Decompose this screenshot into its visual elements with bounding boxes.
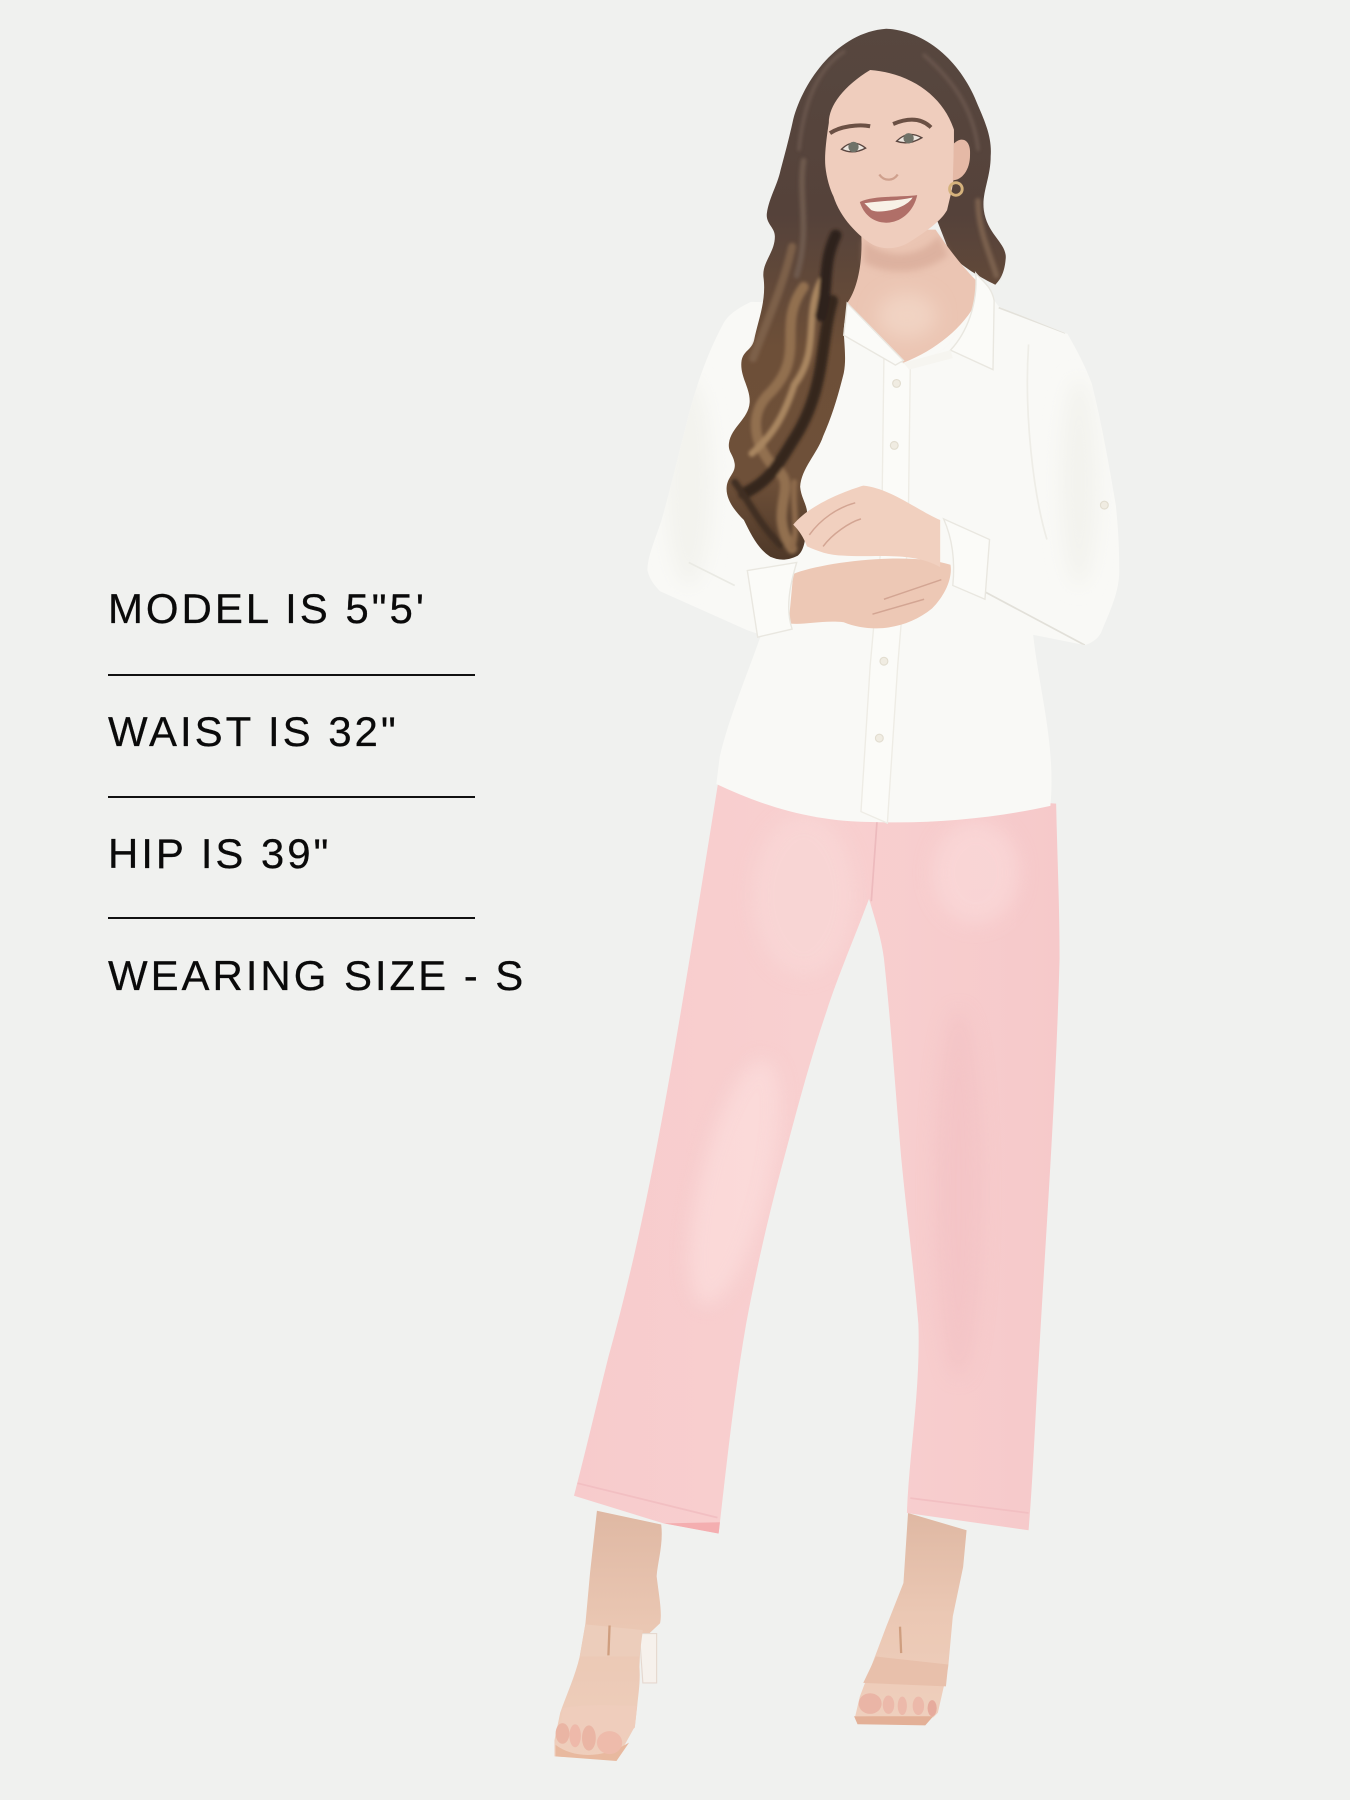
measurement: size worn: WEARING SIZE - S (108, 952, 526, 999)
measurement: hip: HIP IS 39" (108, 830, 331, 877)
white shirt (647, 276, 1119, 823)
pink trousers (574, 779, 1060, 1534)
shirt buttons (763, 380, 1108, 742)
shirt collar (844, 273, 994, 370)
nose (879, 174, 898, 180)
clasped hands and cuffs (747, 486, 990, 637)
face, ear and features (825, 70, 970, 248)
clear heel (639, 1634, 657, 1683)
neck and chest (847, 230, 977, 363)
wavy brown hair (727, 29, 1006, 560)
eyes (841, 133, 922, 152)
left leg with clear sandal (554, 1511, 662, 1761)
measurement: height: MODEL IS 5"5' (108, 585, 427, 632)
smile (860, 195, 917, 223)
model photo illustration (554, 28, 1119, 1761)
eyebrows (830, 120, 931, 133)
hoop earring (950, 183, 962, 195)
measurement: waist: WAIST IS 32" (108, 708, 399, 755)
model measurements list (108, 585, 526, 999)
strap (580, 1624, 643, 1657)
hair strands (735, 52, 996, 549)
shirt placket (861, 356, 910, 823)
right leg with clear sandal (854, 1513, 967, 1725)
toes and sole (556, 1723, 629, 1761)
